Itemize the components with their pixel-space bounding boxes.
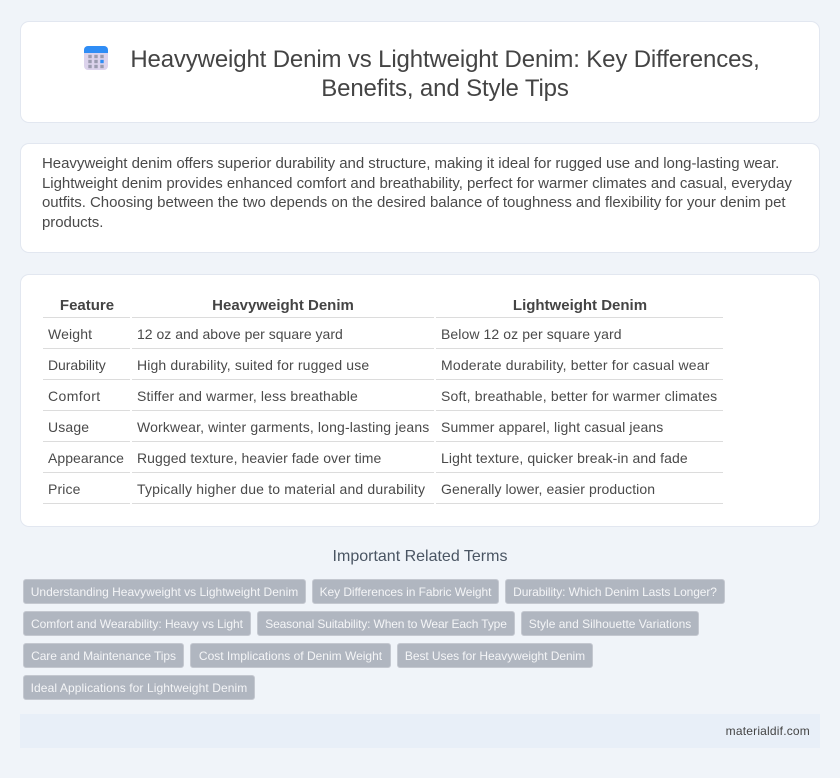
title	[130, 46, 760, 102]
table rows: Generally lower, easier production	[441, 481, 655, 497]
icon: calendar	[84, 46, 108, 70]
table rows: Stiffer and warmer, less breathable	[137, 388, 358, 404]
table header: Lightweight Denim	[513, 297, 647, 314]
intro text: Heavyweight denim offers superior durability and structure, making it ideal for rugged use and long-lasting wear.	[42, 155, 779, 172]
related term tags: Understanding Heavyweight vs Lightweight Denim	[31, 585, 298, 599]
table rows: Light texture, quicker break-in and fade	[441, 450, 688, 466]
related term tags: Style and Silhouette Variations	[529, 617, 691, 631]
related term tags: Cost Implications of Denim Weight	[199, 649, 382, 663]
table rows: Summer apparel, light casual jeans	[441, 419, 663, 435]
intro text: Lightweight denim provides enhanced comfort and breathability, perfect for warmer climates and casual, everyday	[42, 174, 792, 192]
related term tags: Care and Maintenance Tips	[31, 649, 176, 663]
table rows: Comfort	[48, 388, 101, 404]
footer bar	[20, 714, 820, 748]
intro text	[42, 155, 792, 230]
footer source: materialdif.com	[726, 724, 810, 738]
table header	[60, 297, 647, 314]
related term tags	[23, 579, 725, 700]
related term tags: Comfort and Wearability: Heavy vs Light	[31, 617, 243, 631]
title: Benefits, and Style Tips	[321, 75, 569, 102]
heading: related terms: Important Related Terms	[333, 548, 507, 565]
related term tags: Seasonal Suitability: When to Wear Each Type	[265, 617, 507, 631]
table rows: 12 oz and above per square yard	[137, 326, 343, 342]
panel: title card	[20, 21, 820, 123]
title: Heavyweight Denim vs Lightweight Denim: Key Differences,	[130, 46, 760, 73]
table header: Feature	[60, 297, 114, 314]
table rows	[43, 317, 723, 504]
table rows: Appearance	[48, 450, 124, 466]
table rows: Below 12 oz per square yard	[441, 326, 622, 342]
related term tags: Best Uses for Heavyweight Denim	[405, 649, 585, 663]
related term tags: Durability: Which Denim Lasts Longer?	[513, 585, 717, 599]
intro text: products.	[42, 214, 103, 230]
table rows: High durability, suited for rugged use	[137, 357, 369, 373]
table rows: Moderate durability, better for casual wear	[441, 357, 710, 373]
table rows: Usage	[48, 419, 89, 435]
table rows: Rugged texture, heavier fade over time	[137, 450, 381, 466]
related term tags: Ideal Applications for Lightweight Denim	[31, 681, 247, 695]
table header: Heavyweight Denim	[212, 297, 354, 314]
table rows: Price	[48, 481, 81, 497]
intro text: outfits. Choosing between the two depends on the desired balance of toughness and flexibility for your denim pet	[42, 194, 786, 211]
table rows: Typically higher due to material and durability	[137, 481, 425, 497]
panel: comparison table	[20, 274, 820, 527]
table rows: Soft, breathable, better for warmer climates	[441, 388, 717, 404]
panel: intro text card	[20, 143, 820, 253]
table rows: Workwear, winter garments, long-lasting jeans	[137, 419, 429, 435]
table rows: Durability	[48, 357, 106, 373]
related term tags: Key Differences in Fabric Weight	[320, 585, 491, 599]
table rows: Weight	[48, 326, 92, 342]
